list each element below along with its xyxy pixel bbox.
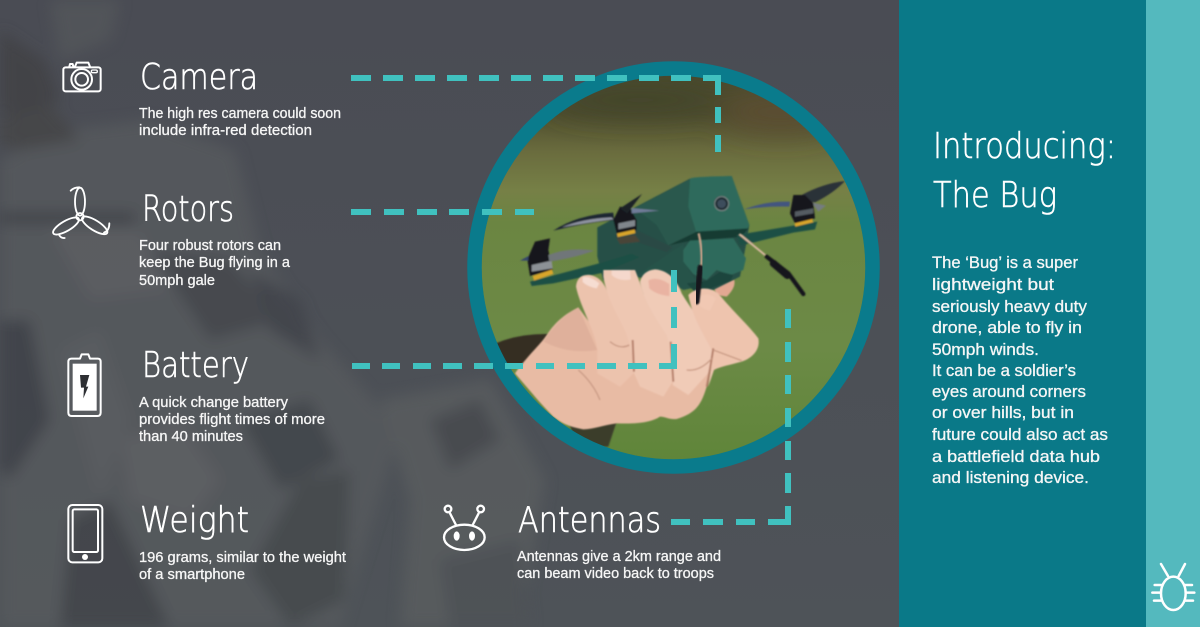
text block: introduction: eyes around corners: [932, 383, 1086, 401]
text block: introduction: a battlefield data hub: [932, 448, 1100, 466]
text block: introduction: future could also act as: [932, 426, 1108, 444]
icon: bug: [1152, 564, 1194, 610]
heading: rotors: Rotors: [142, 189, 234, 230]
title: The Bug: [933, 175, 1057, 216]
item: rotors: [51, 187, 291, 289]
text block: introduction: lightweight but: [932, 276, 1054, 294]
description: antennas: Antennas give a 2km range and: [517, 549, 721, 565]
description: rotors: 50mph gale: [139, 273, 215, 289]
background: blurred camouflage soldier photo: [0, 0, 900, 627]
text block: introduction: or over hills, but in: [932, 404, 1074, 422]
icon: battery: [68, 354, 101, 416]
description: battery: provides flight times of more: [139, 412, 325, 428]
camera lens: [714, 196, 729, 211]
description: battery: [139, 395, 325, 445]
description: weight: of a smartphone: [139, 567, 245, 583]
text block: introduction: It can be a soldier’s: [932, 362, 1076, 380]
description: rotors: [139, 238, 291, 289]
description: battery: A quick change battery: [139, 395, 289, 411]
description: antennas: [517, 549, 721, 582]
description: camera: [139, 106, 341, 139]
teal ring: [474, 68, 872, 466]
heading: weight: Weight: [140, 500, 249, 541]
left rear motor and propeller: [527, 238, 553, 276]
drone: [520, 176, 749, 294]
heading: camera: Camera: [140, 57, 258, 98]
title: [933, 126, 1116, 216]
item: weight: [68, 500, 346, 583]
description: rotors: keep the Bug flying in a: [139, 255, 291, 271]
description: battery: than 40 minutes: [139, 429, 243, 445]
description: camera: include infra-red detection: [139, 123, 312, 139]
drone photo in teal ring: [474, 68, 872, 466]
connector: antennas: [671, 309, 791, 525]
text block: introduction: The ‘Bug’ is a super: [932, 254, 1079, 272]
connector: camera: [351, 75, 721, 81]
text block: introduction: drone, able to fly in: [932, 319, 1082, 337]
icon: antennas face: [444, 506, 485, 550]
description: rotors: Four robust rotors can: [139, 238, 281, 254]
description: camera: The high res camera could soon: [139, 106, 341, 122]
title: Introducing:: [933, 126, 1116, 167]
connector: battery: [352, 270, 677, 369]
heading: battery: Battery: [142, 345, 249, 386]
right arm motor and antenna: [737, 181, 845, 294]
panel: accent strip: [1146, 0, 1200, 627]
icon: rotor: [51, 187, 110, 238]
panel: main introduction column: [899, 0, 1146, 627]
text block: introduction: seriously heavy duty: [932, 298, 1088, 316]
connector: rotors: [351, 209, 534, 215]
text block: introduction: and listening device.: [932, 469, 1089, 487]
item: antennas: [444, 500, 721, 582]
heading: antennas: Antennas: [518, 500, 661, 541]
sleeve and rear finger: [483, 279, 735, 447]
icon: camera: [63, 63, 101, 91]
icon: smartphone: [68, 505, 102, 562]
item: camera: [63, 57, 341, 139]
description: weight: 196 grams, similar to the weight: [139, 550, 346, 566]
left antenna: [697, 233, 702, 302]
item: battery: [68, 345, 325, 445]
description: weight: [139, 550, 346, 583]
hand: [515, 269, 759, 429]
text block: introduction: [932, 254, 1108, 487]
mid motor and propeller: [613, 207, 637, 233]
text block: introduction: 50mph winds.: [932, 341, 1039, 359]
description: antennas: can beam video back to troops: [517, 566, 714, 582]
